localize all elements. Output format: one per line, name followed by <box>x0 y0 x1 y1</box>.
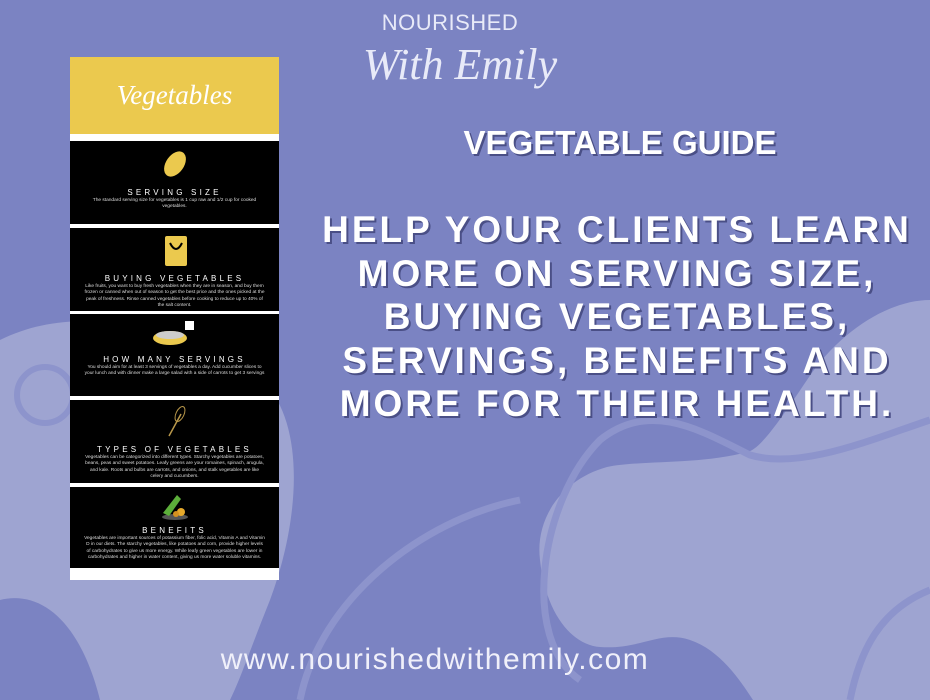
panel: types <box>70 400 279 483</box>
panel: how many servings: HOW MANY SERVINGS <box>103 355 246 364</box>
panel: serving size: SERVING SIZE <box>127 188 222 197</box>
main heading: MORE ON SERVING SIZE, <box>358 252 876 294</box>
logo: With Emily <box>363 40 557 89</box>
panel: benefits: BENEFITS <box>142 526 207 535</box>
main heading: MORE FOR THEIR HEALTH. <box>340 383 894 424</box>
icon: bag <box>165 236 187 266</box>
header: Vegetables <box>117 80 232 110</box>
main heading: BUYING VEGETABLES, <box>384 296 850 337</box>
infographic <box>70 57 279 580</box>
panel: types: Vegetables can be categorized into different types. Starchy vegetables are potatoes, beans, peas and sweet potatoes. Leafy greens are your romaines, spinach, arugula, and kale. Roots and bulbs are carrots, and onions, and stalk vegetables are like celery and cucumbers. <box>85 455 264 479</box>
main heading: HELP YOUR CLIENTS LEARN <box>322 209 912 250</box>
panel: how many servings <box>70 314 279 396</box>
panel: types: TYPES OF VEGETABLES <box>97 445 252 454</box>
main heading: SERVINGS, BENEFITS AND <box>342 340 892 380</box>
panel: serving size <box>70 141 279 224</box>
panel: buying vegetables: BUYING VEGETABLES <box>105 274 244 283</box>
website: www.nourishedwithemily.com <box>221 643 649 676</box>
panel: buying vegetables: Like fruits, you want to buy fresh vegetables when they are in season, and buy them frozen or canned when out of season to get the best price and the ones picked at the peak of freshness. Rinse canned vegetables before cooking to reduce up to 40% of the salt content. <box>84 284 264 308</box>
panel: serving size: The standard serving size for vegetables is 1 cup raw and 1/2 cup for cooked vegetables. <box>93 198 256 209</box>
header <box>70 57 279 134</box>
panel: benefits <box>70 487 279 568</box>
logo: NOURISHED <box>382 10 518 35</box>
icon: plate and cup <box>153 321 194 345</box>
panel: how many servings: You should aim for at least 3 servings of vegetables a day. Add cucumber slices to your lunch and with dinner make a large salad with a side of carrots to get 3 servings <box>85 365 264 376</box>
icon: leaf <box>168 406 186 436</box>
subtitle: VEGETABLE GUIDE <box>464 124 776 161</box>
main heading <box>322 209 912 424</box>
panel: benefits: Vegetables are important sources of potassium fiber, folic acid, Vitamin A and Vitamin D in our diets. The starchy vegetables, like potatoes and corn, provide higher levels of carbohydrates to give us more energy. While leafy green vegetables are lower in carbohydrates and higher in water content, giving us more water soluble vitamins. <box>84 536 265 560</box>
icon: bean <box>164 151 186 177</box>
logo <box>363 10 558 89</box>
panel: buying vegetables <box>70 228 279 311</box>
icon: vegetables <box>162 495 188 520</box>
